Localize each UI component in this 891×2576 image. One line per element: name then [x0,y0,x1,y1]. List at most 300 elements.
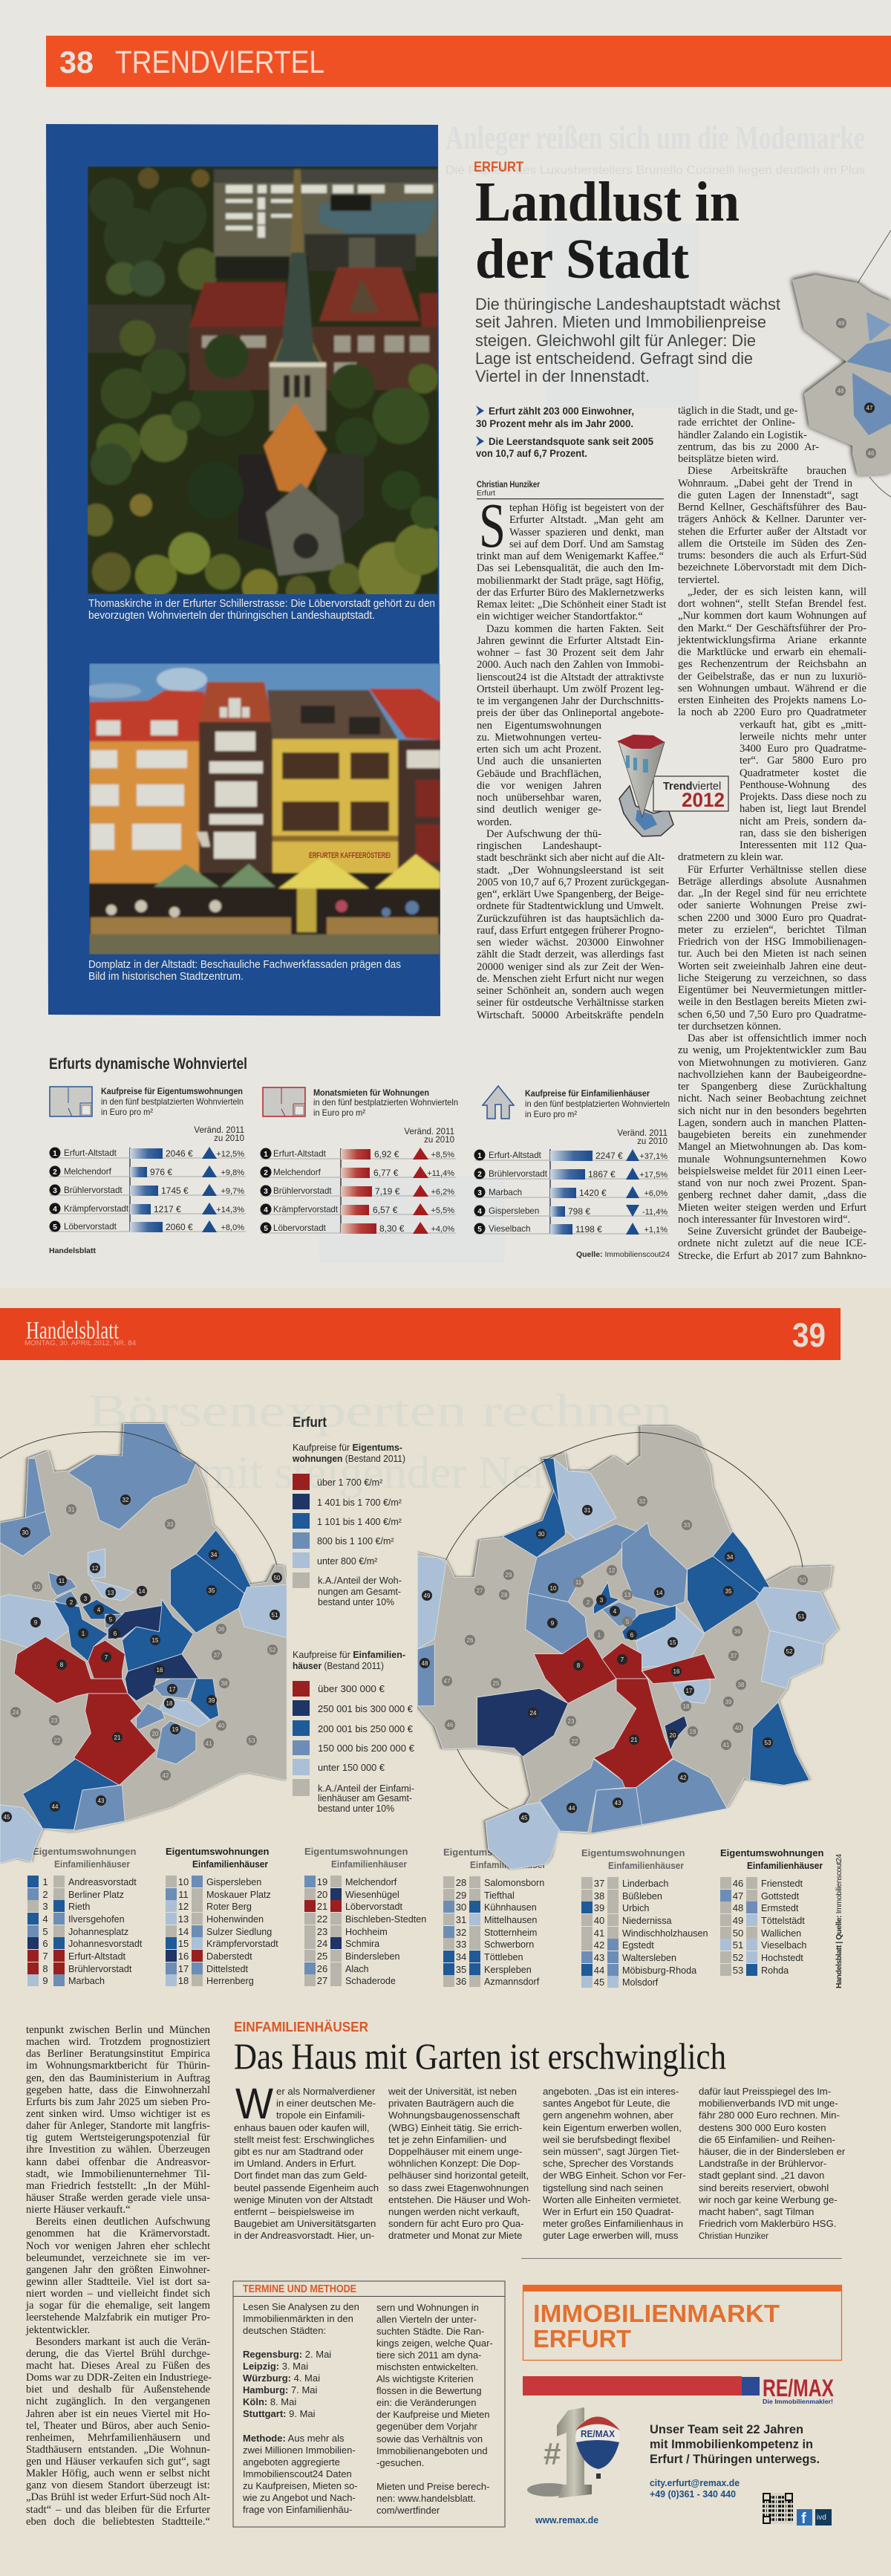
chart heading: in Euro pro m² [525,1109,577,1119]
district column 46–53: Frienstedt [761,1879,803,1889]
district column 19–27: 22 [317,1913,327,1925]
district column 1–9: Marbach [68,1976,105,1986]
header bar page 39: MONTAG, 30. APRIL 2012, NR. 84 [25,1339,136,1347]
bars table: 798 € [568,1206,590,1217]
district column 10–18: Eigentumswohnungen [166,1846,269,1857]
bleed-through headline, lower page: mit steigender Nervosität [200,1448,673,1498]
chart heading: in Euro pro m² [101,1107,153,1117]
bars table: Marbach [489,1188,522,1197]
chart: Kaufpreise für Einfamilienhäuser [474,1086,670,1235]
bars table: 6,92 € [374,1149,399,1159]
ad copy [650,2422,820,2466]
district column 46–53: 53 [733,1965,743,1976]
sidebar article column 1: im Umland. Anders in Erfurt. [234,2158,356,2169]
article continuation column, page 39: nierte Häuser verkauft.“ [26,2204,131,2216]
district column 19–27: 24 [317,1938,327,1949]
legend swatches: apartments: 1 101 bis 1 400 €/m² [317,1517,402,1527]
rule above ad [521,2258,842,2259]
sidebar article column 4: Christian Hunziker [699,2232,768,2241]
article column 1, page 38: Jahren gewinnt die Erfurter Altstadt Ein- [477,635,664,647]
byline: Christian Hunziker [477,481,540,489]
article column 2, page 38: Penthouse-Wohnung des [740,779,866,791]
deck text: Viertel in der Innenstadt. [475,367,650,386]
district column 19–27: Schaderode [345,1976,396,1986]
Trendviertel 2012 badge: 2012 [682,789,725,811]
photo: half-timbered houses on Domplatz [82,663,440,954]
sidebar article column 1: er als Normalverdiener [276,2086,375,2097]
map badges right: 27 [477,1587,483,1594]
map badges left: 7 [105,1654,108,1661]
bars table: +4,0% [431,1225,454,1234]
article column 1, page 38: Das sei Lebensqualität, die auch den Im- [477,562,664,574]
district column 46–53: Einfamilienhäuser [747,1860,823,1871]
kicker: Einfamilienhäuser: EINFAMILIENHÄUSER [234,2020,368,2035]
district column 10–18: 13 [178,1913,189,1925]
district column 46–53 [720,1847,823,1976]
article column 2, page 38: täglich in die Stadt, und ge- [678,405,797,417]
article column 2, page 38: nicht. Nach seiner Beobachtung zeichnet [678,1093,866,1105]
article column 2, page 38: oder sanierte Wohnungen Preise zwi- [678,900,866,911]
info box text column 1: Hamburg: 7. Mai [243,2384,317,2396]
sidebar article column 1: in der Andreasvorstadt. Hier, un- [234,2230,374,2241]
icon: number one with balloon: # [544,2436,561,2471]
bars table: 4 [477,1208,482,1216]
header bar page 39: Handelsblatt [26,1317,119,1344]
bars table: 1 [264,1151,268,1159]
bars table: Erfurt-Altstadt [64,1148,117,1158]
bars table: 5 [53,1223,57,1232]
bars table: 2247 € [595,1151,623,1161]
article column 2, page 38: lerweile nichts mehr unter [740,731,866,743]
ad copy: Unser Team seit 22 Jahren [650,2422,803,2436]
map badges right: 47 [444,1678,451,1685]
legend swatches: houses: k.A./Anteil der Einfami- [318,1783,414,1794]
district column 1–9: Brühlervorstadt [68,1964,132,1974]
sidebar article column 4: fähr 280 000 Euro rechnen. Min- [699,2110,840,2121]
article column 2, page 38: die guten Lagen der Innenstadt“, sagt [678,489,858,501]
district column 10–18: Moskauer Platz [206,1890,271,1900]
map badges right: 14 [656,1590,663,1596]
article column 2, page 38: Wohnraum. „Dabei geht der Trend in [678,477,852,489]
article continuation column, page 39: gewinn aller Stadtteile. Viel ist dort sa- [26,2276,210,2288]
info box text column 1: deutschen Städten: [243,2325,326,2336]
article column 2, page 38: rade errichtet der Online- [678,417,795,429]
vertical source credit: Handelsblatt | Quelle: Immobilienscout24 [835,1853,843,1988]
article column 1, page 38: der das Erfurter Büro des Maklernetzwerks [477,587,664,599]
bars table: +8,0% [221,1223,244,1232]
article column 1, page 38: seiner Schönheit an, sondern auch wegen [477,985,664,997]
sidebar article column 2 [388,2086,531,2241]
map badges right: 3 [600,1597,604,1604]
article continuation column, page 39: eben doch die beliebtesten Stadtteile.“ [26,2516,210,2528]
article column 2, page 38: Eigentümer bei Neuvermietungen mittler- [678,984,866,996]
district column 1–9: 4 [42,1913,48,1925]
district column 1–9: 7 [42,1951,48,1962]
legend swatches: houses: lienhäuser am Gesamt- [318,1793,412,1803]
district column 10–18: 17 [178,1963,189,1974]
district column 1–9: Andreasvorstadt [68,1877,137,1887]
map badges left: 4 [97,1607,101,1613]
map badges right: 28 [501,1592,508,1598]
map badges right: 50 [800,1577,806,1584]
article column 2, page 38: Mieten weiter steigen werden und Erfurt [678,1202,866,1214]
map badges right: 26 [467,1637,474,1644]
bars table: Löbervorstadt [64,1222,117,1232]
article continuation column, page 39: kann dabei offenbar die Andreasvor- [26,2156,210,2168]
icon: house [483,1086,514,1119]
sidebar article column 2: Wohnungsbaugenossenschaft [388,2110,520,2121]
article column 2, page 38: dratmetern zu klein war. [678,851,783,863]
article column 1, page 38: te im vergangenen Jahr der Durchschnitts- [477,695,664,707]
district column 19–27: Löbervorstadt [345,1902,403,1912]
map badges right: 25 [493,1680,500,1687]
map badges right: 21 [631,1737,638,1743]
sidebar article column 2: pelhäuser sind horizontal geteilt, [388,2170,529,2181]
QR code [763,2493,793,2524]
bars table: +5,5% [431,1206,454,1215]
district column 37–45: Eigentumswohnungen [581,1847,685,1858]
article continuation column, page 39: tel, Theater und Büros, aber auch Senio- [26,2420,210,2432]
article continuation column, page 39: beleumundet, verzeichnete sie im ver- [26,2252,210,2264]
drop cap W: W [235,2080,273,2128]
sidebar article column 3: weil sie berufsbedingt flexibel [543,2134,670,2145]
article column 2, page 38: Seine Zuversicht gründet der Baubeige- [688,1226,866,1237]
legend swatches: apartments [293,1474,402,1607]
map badges right: 34 [727,1554,734,1561]
article continuation column, page 39: machen wird. Trotzdem prognostiziert [26,2036,210,2048]
map badges left: 53 [249,1737,255,1744]
district column 28–36 [443,1847,546,1987]
map shapes right [417,1426,838,1870]
district column 46–53: 51 [733,1939,743,1951]
bars table: 3 [53,1187,57,1195]
map fragment from the facing page: 46 [868,450,875,457]
article column 2, page 38: ter Spangenberg diese Zurückhaltung [678,1081,866,1093]
district column 1–9: 5 [42,1926,48,1937]
chart credit Handelsblatt: Handelsblatt [49,1246,97,1255]
article column 2, page 38: zu wenig, um Projektentwickler zum Bau [678,1044,866,1056]
info box text column 1: zwei Millionen Immobilien- [243,2445,356,2456]
bars table: +6,0% [644,1189,668,1198]
bars table: +9,8% [221,1168,244,1177]
caption: Thomaskirche: bevorzugten Wohnvierteln der thüringischen Landeshauptstadt. [88,609,375,622]
article column 2, page 38: baugebieten bereits ein zunehmender [678,1129,866,1141]
bars table: -11,4% [642,1208,668,1217]
sidebar article column 1: gibt es nur am Stadtrand oder [234,2146,363,2157]
article column 1, page 38: tephan Höfig ist begeistert von der [509,502,664,514]
district column 1–9: 3 [42,1901,48,1912]
district column 19–27: 21 [317,1901,327,1912]
sidebar article column 1: wenige Minuten von der Altstadt [234,2194,373,2205]
district column 28–36: 32 [456,1927,466,1938]
map badges right: 45 [521,1815,528,1821]
ad: RE/MAX: Die Immobilienmakler! [763,2398,833,2405]
district column 19–27: Eigentumswohnungen [304,1846,408,1857]
article column 1, page 38: sei auf dem Dorf. Und am Samstag [509,539,664,550]
article column 2, page 38: von Mietwohnungen zu motivieren. Ganz [678,1056,866,1068]
article continuation column, page 39: stadt“ – und das bleiben für die Erfurter [26,2504,210,2516]
district column 46–53: Gottstedt [761,1891,800,1902]
district column 28–36: 36 [456,1976,466,1987]
article column 1, page 38: Gebäude und Brachflächen, [477,768,601,780]
chart heading: in den fünf bestplatzierten Wohnvierteln [313,1097,458,1108]
key facts bullets [476,406,653,459]
chart heading [313,1087,458,1118]
sidebar article column 2: sondern für acht Euro pro Qua- [388,2218,524,2229]
district column 19–27: Hochheim [345,1927,388,1937]
map: Einfamilienhäuser prices by district [417,1426,838,1870]
map badges right: 52 [786,1648,793,1655]
district column 19–27: Bischleben-Stedten [345,1914,426,1925]
chart heading: Monatsmieten für Wohnungen [313,1087,429,1098]
district column 10–18: Dittelstedt [206,1964,248,1974]
map badges left [1,1494,282,1822]
change column heading: Veränd. 2011 [404,1128,454,1136]
district column 46–53: 48 [733,1902,743,1913]
article column 2, page 38: händler Zalando ein Logistik- [678,429,807,441]
district column 10–18: Gispersleben [206,1877,261,1887]
info box text column 1 [243,2301,359,2516]
key facts bullets: Erfurt zählt 203 000 Einwohner, [489,406,634,417]
ad copy: mit Immobilienkompetenz in [650,2437,813,2451]
sidebar article column 3 [543,2086,686,2241]
deck text: seit Jahren. Mieten und Immobilienpreise [475,313,766,331]
district column 46–53: 47 [733,1890,743,1902]
district column 19–27: 25 [317,1951,327,1962]
bars table: 1 [53,1150,57,1158]
article continuation column, page 39: gangenen Jahr den größten Einwohner- [26,2264,210,2276]
sidebar article column 1: Dort findet man das zum Geld- [234,2170,368,2181]
map badges right: 43 [615,1800,621,1806]
article column 2, page 38: beitsplätze bieten wird. [678,453,779,465]
change column heading: zu 2010 [637,1137,668,1146]
article column 2, page 38: Für Erfurter Verhältnisse stellen diese [688,863,866,875]
map badges right: 30 [538,1531,545,1538]
district column 19–27: Melchendorf [345,1877,397,1887]
sidebar article column 1: entfernt – beispielsweise im [234,2206,354,2217]
change column heading [404,1128,454,1145]
map badges left: 36 [218,1626,225,1633]
article column 2, page 38: Das aber ist offensichtlich immer noch [688,1032,866,1044]
sidebar article column 4: destens 300 000 Euro kosten [699,2122,826,2133]
article column 1, page 38: Der Aufschwung der thü- [486,828,601,840]
district column 37–45: Möbisburg-Rhoda [622,1965,696,1976]
sidebar article column 1: enhaus bauen oder kaufen will, [234,2122,370,2133]
legend heading: houses: Kaufpreise für Einfamilien- [293,1649,405,1660]
district list [27,1846,823,1988]
info box text column 1: zu Kaufpreisen, Mieten so- [243,2480,358,2491]
map badges right: 51 [798,1613,805,1620]
district column 37–45: 42 [594,1939,604,1951]
map badges right: 40 [735,1725,742,1731]
article column 2, page 38: Bernd Kellner, Geschäftsführer des Bau- [678,501,866,513]
district column 1–9: Berliner Platz [68,1890,124,1900]
sidebar article column 2: wöhnlichen Konzept: Die Dop- [388,2158,520,2169]
article column 1, page 38: zu. Mietwohnungen verteu- [477,732,601,744]
article column 1, page 38: Wasser spazieren und denkt, man [509,526,664,538]
district column 37–45: 39 [594,1902,604,1913]
article continuation column, page 39: Erfurts bis zum Jahr 2025 um sieben Pro- [26,2096,210,2108]
article column 1, page 38: Zurückzuführen ist das hauptsächlich da- [477,912,664,924]
article column 1, page 38: 2005 von 10,7 auf 6,7 Prozent zurückgegan- [477,876,669,888]
headline: Landlust in der Stadt [475,171,740,290]
bars table [474,1149,669,1235]
district column 28–36: 29 [456,1890,466,1901]
deck text: Lage ist entscheidend. Gefragt sind die [475,349,753,368]
district column 1–9: Johannesplatz [68,1927,128,1937]
chart heading [525,1088,670,1119]
district column 28–36: Kerspleben [484,1965,532,1975]
bleed-through headline, lower page [88,1386,673,1498]
kicker: Erfurt: ERFURT [474,160,523,175]
district column 37–45: Linderbach [622,1879,668,1889]
header bar page 39: 39 [792,1316,826,1354]
district column 28–36: Stotternheim [484,1928,537,1938]
article column 2, page 38: verkauft hat, gibt es „mitt- [740,719,866,731]
map badges left: 16 [157,1667,163,1674]
chart section title: Erfurts dynamische Wohnviertel [49,1056,247,1073]
map badges left: 34 [211,1552,218,1558]
map badges right: 37 [731,1653,737,1659]
article column 1, page 38: preis der über das Onlineportal angebote- [477,707,664,719]
article continuation column, page 39: tig gutem Wertsteigerungspotenzial für [26,2132,210,2144]
article column 1, page 38: erten sich um acht Prozent. [477,744,601,755]
article continuation column, page 39: macht hat. Dieses Areal zu Füßen des [26,2360,210,2372]
district column 46–53: 49 [733,1915,743,1926]
brand bar [523,2376,742,2396]
district column 46–53: 50 [733,1928,743,1939]
sidebar article column 2: weit der Universität, ist neben [388,2086,517,2097]
district column 19–27: Einfamilienhäuser [331,1858,407,1870]
district column 46–53: Ermstedt [761,1903,799,1913]
sidebar article column 1: in einer deutschen Me- [276,2098,376,2109]
article column 1, page 38: trinkt man auf dem Wenigemarkt Kaffee.“ [477,550,664,562]
bars table: Brühlervorstadt [64,1185,123,1195]
map badges right: 49 [424,1593,431,1599]
article continuation column, page 39: „Das Brühl ist weder Erfurt-Süd noch Alt- [26,2491,210,2503]
sidebar article column 2: tet je zehn Einfamilien- und [388,2134,506,2145]
district column 46–53: Wallichen [761,1928,801,1939]
sidebar article column 4: Landstraße in der Brühlervor- [699,2158,826,2169]
district column 10–18: 18 [178,1975,189,1986]
district column 10–18: Herrenberg [206,1976,254,1986]
district column 28–36: 35 [456,1964,466,1975]
deck text [475,295,780,386]
district column 37–45: Egstedt [622,1940,654,1951]
article column 1, page 38: ringischen Landeshaupt- [477,840,601,852]
district column 37–45: Büßleben [622,1891,662,1902]
article column 2, page 38: meter zu erzielen“, berichtet Tilman [678,924,866,936]
map badges left: 24 [13,1709,19,1716]
bleed-through headline, lower page: Börsenexperten rechnen [88,1386,673,1437]
sidebar article column 3: Wer in Erfurt ein 150 Quadrat- [543,2206,673,2217]
key facts bullets: 30 Prozent mehr als im Jahr 2000. [476,418,633,429]
sidebar article column 3: angeboten. „Das ist ein interes- [543,2086,679,2097]
district column 46–53: Vieselbach [761,1940,806,1951]
district column 10–18: 11 [178,1889,189,1900]
legend: Erfurt map keys [287,1415,417,1842]
bars table: 2 [477,1171,482,1179]
info box text column 2: flossen in die Bewertung [376,2385,482,2396]
legend swatches: houses: über 300 000 € [318,1684,385,1694]
district column 1–9: Rieth [68,1902,90,1912]
map badges right: 10 [550,1585,557,1592]
sidebar article column 3: der WBG Einheit. Schon vor Fer- [543,2170,686,2181]
change column heading: zu 2010 [214,1134,244,1143]
map badges right: 32 [639,1498,646,1505]
map badges left: 35 [209,1587,215,1594]
map badges left: 8 [60,1662,64,1668]
map badges right: 4 [613,1608,617,1615]
headline: Das Haus mit Garten: Das Haus mit Garten ist erschwinglich [234,2035,726,2077]
bars table: +14,3% [216,1206,244,1214]
district column 1–9 [27,1846,143,1986]
legend heading: apartments: wohnungen (Bestand 2011) [292,1453,405,1464]
map badges left: 38 [221,1680,228,1687]
info box text column 1: Methode: Aus mehr als [243,2433,345,2444]
article column 2, page 38: Strecke, die Erfurt ab 2017 zum Bahnkno- [678,1249,866,1261]
map badges left: 15 [152,1637,159,1644]
blue photo panel [46,124,445,1016]
article column 2, page 38: ter“. Gar 5800 Euro pro [740,755,866,767]
sidebar article column 1: Baugebiet am Universitätsgarten [234,2218,376,2229]
map badges right: 17 [686,1688,693,1694]
district column 10–18: Roter Berg [206,1902,252,1912]
change column heading: zu 2010 [424,1136,454,1145]
change column heading: Veränd. 2011 [617,1129,668,1138]
article continuation column, page 39: Makler Höfig, auch wenn er selbst nicht [26,2468,210,2479]
info box text column 1: Köln: 8. Mai [243,2396,296,2407]
article column 1, page 38: rauf, dass Erfurt entgegen früherer Progno- [477,925,664,937]
article column 2, page 38: munale Wohnungsunternehmen Kowo [678,1153,866,1165]
article continuation column, page 39: ganz von diesem Standort überzeugt ist: [26,2479,210,2491]
bars table: Löbervorstadt [273,1223,327,1233]
district column 37–45: Molsdorf [622,1977,659,1988]
map badges right: 15 [670,1639,676,1646]
article column 2, page 38: „Jeder, der es sich leisten kann, will [688,586,866,598]
sidebar article column 3: gern angenehm wohnen, aber [543,2110,673,2121]
bars table: Melchendorf [64,1167,112,1177]
info box text column 1: Immobilienmärkten in den [243,2313,353,2324]
legend heading: apartments: Kaufpreise für Eigentums- [293,1442,402,1453]
bars table: Gispersleben [489,1206,539,1216]
bars table: 3 [477,1189,482,1197]
header bar page 39 [0,1308,841,1360]
article column 2, page 38: ordnete nicht zuletzt auf die neue ICE- [678,1237,866,1249]
map badges right: 12 [609,1567,616,1574]
bars table: +8,5% [431,1151,454,1159]
article continuation column, page 39: Besonders markant ist auch die Verän- [36,2336,210,2348]
bars table: Vieselbach [489,1224,531,1234]
district column 19–27: 26 [317,1963,327,1974]
map badges right: 22 [572,1738,578,1745]
article column 2, page 38: stand von nur noch zwei Prozent. Span- [678,1177,866,1189]
article column 2, page 38: „Nur kommen dort kaum Wohnungen auf [678,610,866,622]
article continuation column, page 39: tenpunkt zwischen Berlin und München [26,2024,210,2036]
article column 2, page 38: trums: besonders die auch als Erfurt-Süd [678,550,866,562]
article column 1, page 38: lienscout24 ist die Altstadt der attraktivste [477,671,664,683]
article column 2, page 38: ran, dass sie den bisherigen [740,827,866,839]
article continuation column, page 39: niert worden – und vielleicht findet sich [26,2288,210,2300]
district column 19–27: 27 [317,1975,327,1986]
bars table: +11,4% [427,1169,454,1178]
headline: Landlust in der Stadt: Landlust in [475,171,740,233]
map badges right: 1 [598,1632,601,1639]
map badges left: 42 [163,1772,169,1779]
legend swatches: apartments: bestand unter 10% [318,1597,394,1607]
sidebar article column 4: sind bereits reserviert, obwohl [699,2182,829,2193]
article column 1, page 38: die vor wenigen Jahren [477,780,601,792]
